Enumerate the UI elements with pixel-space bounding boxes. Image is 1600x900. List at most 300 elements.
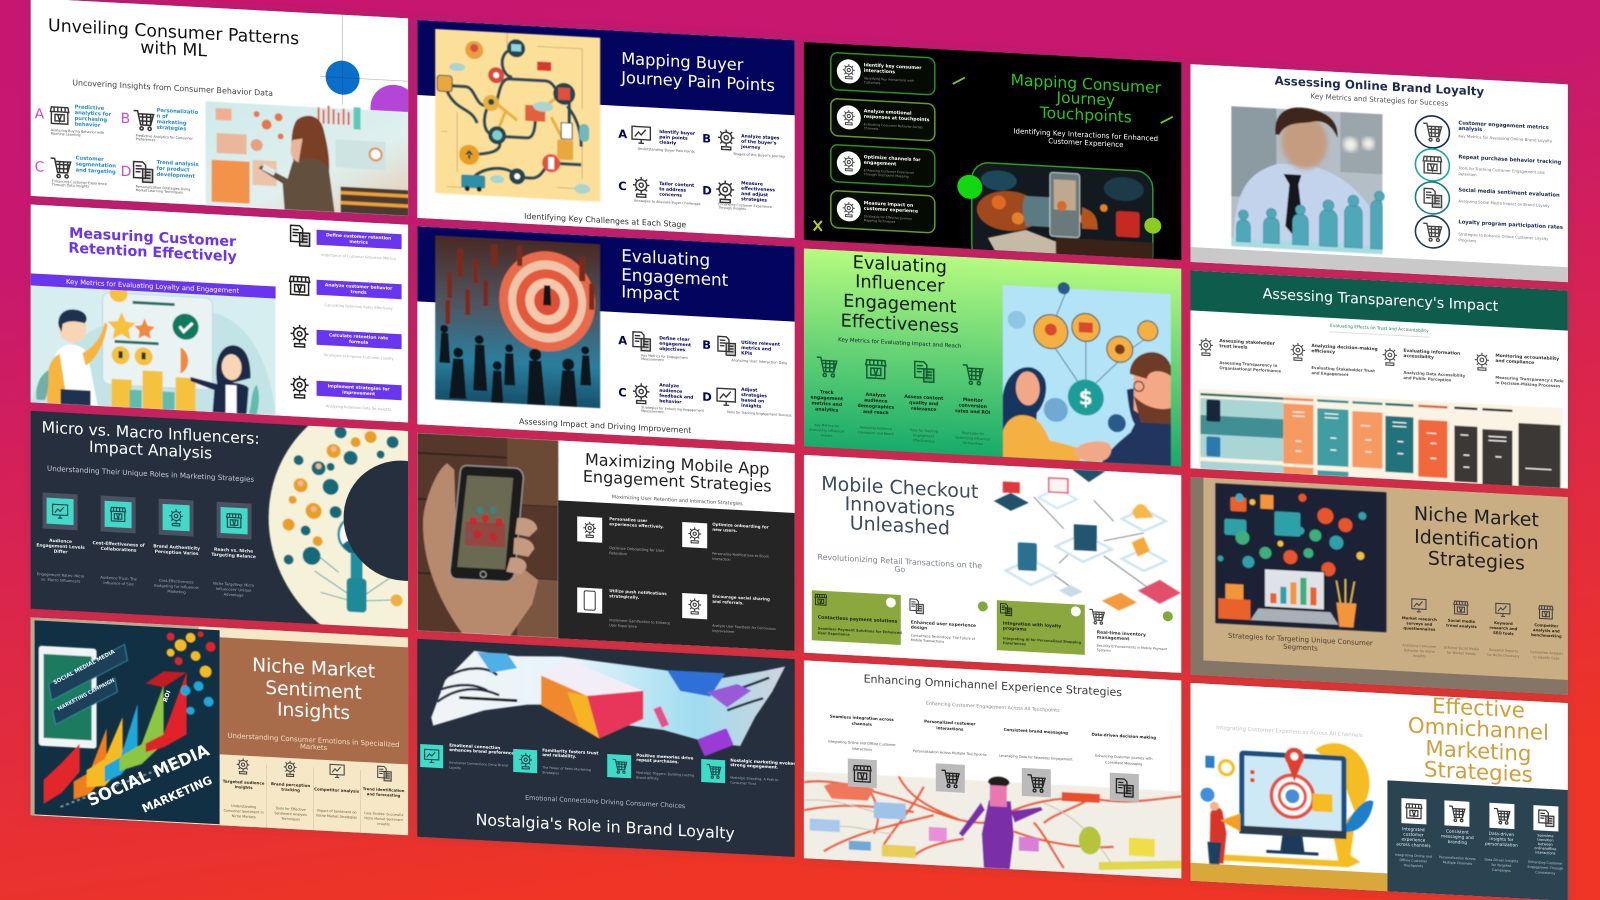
column: authenticity: Cost-Effectiveness:	[159, 579, 194, 585]
photo: phone in coffee cup	[972, 162, 1153, 272]
title: Journey	[1056, 88, 1115, 110]
column: data-driven: Data-driven	[1489, 831, 1514, 838]
panel: Evaluating Influencer Engagement Effectiveness	[804, 248, 1182, 467]
item A: A	[35, 106, 45, 123]
item: accessibility: Evaluating information	[1403, 348, 1460, 357]
item A: Key Metrics for Engagement	[641, 353, 689, 360]
item: engagement metrics: analysis	[1458, 126, 1482, 133]
panel: Niche Market Identification Strategies	[1190, 477, 1568, 695]
title: Identification	[1414, 526, 1539, 554]
panel: Unveiling Consumer Patterns with ML	[31, 0, 409, 216]
step: define	[291, 225, 402, 261]
card: inventory: Systems	[1097, 648, 1111, 653]
item B	[702, 335, 787, 365]
title: Enhancing Omnichannel Experience Strategies	[864, 672, 1122, 699]
card: interactions: Customers	[864, 80, 881, 85]
item D: Adjust	[741, 387, 758, 394]
dark content panel	[558, 500, 795, 651]
column: consistent: Leveraging Data for Seamless Engagement	[999, 754, 1073, 762]
method: surveys: Behavior for Niche	[1404, 648, 1435, 654]
item A: A	[618, 127, 627, 141]
item: decision-making: efficiency	[1311, 348, 1335, 355]
column: trends: and forecasting	[367, 791, 401, 798]
card: user experience: Enhanced user experience	[911, 620, 976, 629]
panel: Assessing Online Brand Loyalty	[1190, 64, 1568, 282]
method: keywords: research and	[1489, 625, 1518, 631]
method: keywords: Research Reports	[1489, 648, 1518, 653]
item B: Analyzing User Interaction Data	[731, 358, 787, 365]
subtitle: Uncovering Insights from Consumer Behavior Data	[72, 78, 273, 98]
item: familiarity: and reliability.	[542, 752, 577, 759]
item: repeat purchase	[1415, 148, 1562, 188]
column: seamless: online/offline	[1534, 846, 1556, 851]
item C: behavior	[659, 398, 682, 405]
column: personalized	[913, 718, 987, 794]
metric: assess: Engagement	[913, 433, 935, 438]
method: surveys	[1402, 598, 1437, 659]
column: reach: Niche Targeting: Micro	[213, 582, 255, 588]
item: push notifications: Implement Gamification to Enhance	[609, 618, 670, 625]
item A	[618, 331, 692, 364]
item A: pain points	[659, 134, 688, 142]
column: data-driven: Data-driven decision making	[1091, 732, 1156, 740]
step: analyze: trends	[351, 289, 367, 296]
item: emotional connection: Emotional Connections Drive Brand	[449, 761, 508, 768]
item: emotional connection: Loyalty	[449, 766, 461, 770]
method: surveys: questionnaires	[1403, 625, 1436, 632]
item B: Utilize relevant	[741, 340, 781, 348]
item: engagement metrics: Customer engagement metrics	[1458, 120, 1549, 131]
column: integrated: across channels	[1396, 841, 1431, 849]
column: integration: Interactions	[852, 747, 872, 752]
column: authenticity	[153, 498, 200, 595]
item: emotional connection	[420, 741, 516, 773]
item D	[702, 178, 775, 213]
illustration: isometric checkout network	[994, 465, 1181, 614]
column: seamless	[1528, 805, 1563, 876]
metric: track: Key Metrics for	[815, 423, 840, 428]
subtitle: Identifying Key Interactions for Enhanced	[1013, 127, 1158, 143]
item: trust: Organizational Performance	[1219, 365, 1281, 373]
title: Niche Market	[252, 655, 375, 683]
method: social: trend analysis	[1446, 622, 1477, 629]
step: analyze: Calculating Retention Rates Effectively	[325, 303, 393, 311]
item D: development	[157, 172, 195, 180]
item: push notifications	[577, 586, 670, 631]
card: interactions: interactions	[864, 68, 895, 75]
method: surveys: Analyzing Consumer	[1402, 643, 1437, 649]
item: familiarity: The Power of Retro Marketing	[541, 765, 591, 772]
method: social: Utilizing Social Media	[1444, 645, 1479, 651]
column: integration: Seamless integration across	[830, 714, 894, 722]
subtitle: Understanding Consumer Emotions in Specialized	[228, 732, 400, 749]
item: sentiment	[1415, 181, 1560, 221]
metric: assess: Effectiveness	[913, 438, 935, 443]
dark content panel	[1387, 780, 1568, 900]
item: memories: Nostalgic Triggers: Building Lasting	[636, 771, 694, 778]
step: define: metrics	[349, 239, 368, 246]
title: Journey Pain Points	[620, 68, 775, 95]
metric: monitor: Optimizing Influencer	[955, 435, 991, 441]
column: consistent: Consistent	[1446, 828, 1469, 836]
column: audience: Targeted audience	[223, 778, 265, 786]
item C: C	[35, 159, 45, 176]
subtitle: Segments	[1283, 643, 1318, 653]
item: emotional connection: enhances brand preference.	[449, 747, 516, 756]
illustration: social media marketing bars: SOCIAL MEDIA	[84, 740, 212, 810]
column: authenticity: Budgeting for Influencer	[154, 584, 200, 590]
column: reach: Targeting Balance	[211, 552, 256, 560]
item D: Tools for Tracking Engagement Success	[726, 410, 792, 417]
method: keywords: Keyword	[1494, 620, 1513, 626]
column: authenticity: Marketing	[167, 590, 186, 595]
illustration: journey map	[435, 29, 600, 202]
item C	[618, 176, 701, 206]
card: interactions	[831, 52, 935, 95]
card: emotional responses: Evaluating Consumer Behavior Across	[864, 122, 923, 129]
column: data-driven: Data-Driven Insights	[1484, 858, 1519, 863]
panel: Enhancing Omnichannel Experience Strategies	[804, 660, 1182, 878]
item: engagement metrics	[1415, 115, 1553, 154]
title: Micro vs. Macro Influencers:	[42, 418, 260, 448]
title: Effective	[1432, 694, 1525, 724]
item D: D	[702, 390, 712, 404]
title: Touchpoints	[1039, 104, 1132, 127]
card: user experience: Mobile Transactions	[911, 638, 944, 644]
item C: C	[618, 179, 627, 193]
column: reach: Influencers' Unique	[216, 587, 252, 593]
item: memories: repeat purchases.	[636, 757, 679, 764]
column: integrated	[1395, 798, 1432, 869]
title: Mobile Checkout	[821, 473, 978, 503]
title: Niche Market	[1414, 503, 1539, 531]
item B: Preferences	[136, 137, 156, 142]
method: competitors: to Identify Gaps	[1533, 655, 1560, 661]
item D: Enhancing Customer Experience	[718, 202, 772, 209]
step: analyze: Analyze customer behavior	[325, 282, 393, 292]
column: engagement levels: vs. Macro Influencers	[41, 578, 80, 584]
step: define: Define customer retention	[326, 232, 391, 242]
title: with ML	[140, 38, 207, 61]
item: sharing: Analyze User Feedback for Continuous	[712, 624, 776, 631]
item: sharing	[682, 592, 776, 636]
item A: Machine Learning	[51, 132, 81, 137]
item A: Analyzing Buying Behavior with	[51, 128, 104, 135]
column: perception: Brand perception	[271, 781, 310, 788]
card: emotional responses: Analyze emotional	[864, 108, 912, 117]
item: accessibility: accessibility	[1403, 353, 1434, 361]
icon: blue circle	[326, 60, 360, 96]
column: personalized: Personalized customer	[924, 719, 976, 726]
metric: track: Evaluating Influencer	[809, 428, 845, 434]
item: accountability: Monitoring accountability	[1495, 353, 1559, 362]
item: onboarding: Optimize onboarding for	[712, 522, 769, 530]
item C: C	[618, 385, 627, 400]
item A: Identify buyer	[659, 129, 696, 137]
metric: analyze: demographics	[858, 403, 894, 411]
item A: clearly	[659, 140, 676, 146]
step: implement: Analyzing Retention Data for Insights	[326, 404, 391, 412]
method: surveys: surveys and	[1406, 620, 1433, 627]
item B: Stages of the Buyer's Journey	[733, 152, 785, 159]
column: consistent: Personalization Across	[1439, 855, 1476, 861]
column: competitors: Niche Market Strategies	[316, 813, 357, 820]
column: seamless: Consistency	[1535, 870, 1555, 875]
column: perception: Sentiment Analysis	[274, 811, 307, 817]
column: trends	[363, 765, 405, 827]
accent dashes	[953, 77, 1173, 124]
illustration: social media marketing bars: ROI	[162, 690, 173, 703]
method: competitors: Competitor Analysis	[1530, 650, 1563, 656]
illustration: handshake with influencers	[1003, 279, 1171, 466]
column: seamless: interactions	[1535, 850, 1556, 856]
item: repeat purchase: Tools for Tracking Customer Engagement and	[1457, 165, 1545, 175]
item: sentiment: Social media sentiment evaluation	[1458, 187, 1560, 199]
item: accountability: Measuring Transparency's Role	[1495, 375, 1564, 383]
title: Nostalgia's Role in Brand Loyalty	[476, 810, 735, 843]
title: Influencer	[855, 271, 945, 297]
illustration: social media marketing bars: MARKETING CAMPAIGN	[57, 678, 116, 712]
photo: woman viewing data wall	[206, 99, 409, 216]
column: cost-effectiveness: Cost-Effectiveness of	[93, 540, 145, 549]
title: Effectiveness	[841, 310, 959, 338]
title: Impact Analysis	[89, 438, 212, 463]
step: implement	[291, 375, 402, 412]
item D: based on	[741, 397, 764, 405]
column: integrated: Integrating Online and	[1395, 853, 1432, 859]
title: Sentiment	[265, 678, 362, 704]
column: trends: Insights	[377, 822, 390, 826]
photo: hand holding phone	[417, 433, 558, 638]
column: consistent	[1439, 800, 1476, 866]
item B: B	[702, 131, 711, 146]
item: marketing: Nostalgic marketing evokes	[730, 758, 796, 766]
item A: objectives	[659, 346, 685, 353]
item A: Define clear	[659, 335, 690, 343]
metric: track	[809, 357, 845, 439]
metric: assess: Assess content	[904, 394, 944, 402]
card: loyalty: Integrating AI for Personalized Shopping	[1003, 636, 1082, 645]
card: contactless: Contactless payment solutions	[818, 615, 898, 625]
item B: KPIs	[741, 350, 753, 357]
column: personalized: Personalization Across Multiple Touchpoints	[913, 749, 987, 757]
item B: strategies	[157, 125, 186, 132]
item: sentiment: Analyzing Social Media Impact on Brand Loyalty	[1458, 198, 1550, 208]
item: push notifications: strategically.	[609, 593, 640, 600]
item A: purchasing	[75, 116, 107, 124]
item: sharing: Encourage social sharing	[712, 594, 770, 602]
card: user experience: design	[911, 625, 927, 631]
title: Evaluating	[853, 252, 947, 278]
column: trends: Niche Market Sentiment	[364, 816, 404, 822]
column: cost-effectiveness	[93, 495, 145, 587]
metric: assess: Tools for Tracking	[909, 428, 938, 434]
card: impact	[831, 190, 935, 233]
column: authenticity: Brand Authenticity	[153, 543, 200, 552]
item: onboarding	[682, 520, 769, 564]
subtitle: Strategies for Targeting Unique Consumer	[1228, 632, 1373, 648]
title band	[417, 20, 795, 115]
column: consistent	[999, 727, 1073, 799]
item: repeat purchase: Retention	[1458, 171, 1477, 177]
item C: Through Data Insights	[51, 183, 89, 189]
metric: assess: quality and	[909, 400, 938, 407]
item C: and targeting	[76, 167, 116, 176]
metric: track: engagement	[811, 395, 844, 402]
item A: Understanding Buyer Pain Points	[638, 147, 695, 154]
item: marketing	[701, 756, 796, 788]
metric: track: analytics	[815, 406, 839, 414]
column: data-driven	[1484, 803, 1519, 873]
item: memories	[607, 751, 694, 783]
title: Engagement	[843, 291, 957, 318]
card: channels: engagement	[864, 160, 897, 167]
item B: marketing	[157, 119, 187, 127]
subtitle: Key Metrics for Evaluating Impact and Reach	[838, 337, 962, 350]
method: keywords: for Niche Discovery	[1487, 653, 1520, 658]
card: interactions: Identifying Key Interactions with	[864, 76, 914, 83]
title: Assessing Online Brand Loyalty	[1275, 74, 1484, 99]
item C: feedback and	[659, 393, 693, 401]
column: integration	[828, 713, 896, 789]
column: seamless: transition	[1537, 838, 1553, 843]
illustration: marketing monitor	[1200, 736, 1373, 873]
item C: audience	[659, 388, 682, 395]
item D	[121, 158, 199, 195]
method: competitors	[1530, 605, 1563, 661]
column: perception: Techniques	[280, 817, 300, 822]
item: memories: Brand Affinity	[636, 776, 659, 781]
item: accessibility	[1383, 347, 1466, 383]
item: onboarding: new users.	[712, 527, 738, 533]
metric: analyze: Analyze	[866, 392, 886, 399]
title: Insights	[277, 699, 350, 724]
illustration: mind map with figure	[804, 766, 1182, 878]
icon: green circle	[957, 174, 982, 200]
item D: Trend analysis	[157, 160, 199, 168]
title band	[417, 226, 795, 322]
item C	[35, 153, 116, 190]
method: competitors: benchmarking	[1531, 632, 1562, 639]
column: data-driven: for Targeted	[1491, 863, 1511, 868]
title: Measuring Customer	[69, 225, 237, 250]
column: data-driven	[1091, 732, 1156, 803]
item: sharing: and referrals.	[712, 599, 744, 605]
item: decision-making: and Engagement	[1311, 370, 1349, 377]
item: accountability: in Decision-Making Processes	[1495, 380, 1561, 388]
metric: analyze: and reach	[863, 409, 889, 416]
metric: analyze: Analyzing Audience	[860, 425, 892, 431]
metric: monitor: rates and ROI	[955, 408, 991, 416]
method: social: for Market Trends	[1447, 651, 1476, 656]
panel: Mapping Consumer Journey Touchpoints	[804, 42, 1182, 273]
item: loyalty programs	[1415, 215, 1563, 255]
item D: Personalization Strategies Using	[136, 185, 190, 192]
panel: Maximizing Mobile App Engagement Strategies	[417, 433, 795, 651]
item B: of the buyer's	[741, 139, 777, 147]
card: user experience: Contactless Technology: The Future of	[911, 634, 976, 641]
item: decision-making: Evaluating Stakeholder Trust	[1311, 365, 1375, 373]
column: integrated: customer	[1403, 831, 1424, 838]
item C: Enhancing Customer Experience	[52, 179, 107, 186]
column: audience: Niche Markets	[232, 814, 256, 819]
subtitle: Understanding Their Unique Roles in Marketing Strategies	[47, 464, 254, 484]
title: Innovations	[845, 493, 955, 521]
item C: to address	[659, 186, 686, 194]
metric: monitor	[955, 364, 991, 446]
title: Retention Effectively	[68, 240, 238, 265]
item: loyalty programs: Loyalty program participation rates	[1458, 219, 1563, 231]
item D: for product	[157, 166, 190, 174]
metric: track: metrics and	[811, 400, 842, 408]
item D: strategies	[741, 196, 767, 204]
title: Impact	[621, 281, 680, 304]
column: integrated: Integrated	[1402, 826, 1425, 833]
panel: Mobile Checkout Innovations Unleashed	[804, 455, 1182, 673]
panel: Niche Market Sentiment Insights	[31, 617, 409, 835]
column: data-driven: Consistent Messaging	[1105, 760, 1142, 766]
panel: Mapping Buyer Journey Pain Points	[417, 20, 795, 238]
column: seamless: Enhancing Customer	[1528, 860, 1563, 866]
column: consistent: messaging and	[1441, 833, 1474, 841]
illustration: influencer network ring	[269, 387, 531, 663]
card: loyalty: programs	[1003, 625, 1027, 633]
card: impact: Measure impact on	[864, 200, 913, 209]
metric: assess: relevance	[911, 406, 936, 413]
title: Mapping Consumer	[1011, 71, 1162, 97]
card: inventory	[1089, 607, 1173, 656]
title: Unveiling Consumer Patterns	[48, 16, 299, 49]
card: emotional responses: Channels	[864, 126, 878, 131]
column: audience: Consumer Sentiment in	[224, 809, 264, 815]
comparison table	[1198, 389, 1562, 489]
item A	[35, 102, 111, 139]
column: data-driven: Enhancing Customer Journey with	[1095, 754, 1153, 761]
item D: D	[702, 183, 712, 198]
step: implement: Implement strategies for	[328, 383, 390, 393]
icon: lime circle	[1144, 217, 1161, 234]
column: competitors	[314, 763, 360, 820]
item: accessibility: Analyzing Data Accessibility	[1403, 370, 1466, 378]
illustration: team and rating board	[31, 279, 276, 416]
card: user experience	[910, 597, 988, 646]
card: emotional responses: responses at touchpoints	[864, 114, 930, 123]
item: engagement metrics: Key Metrics for Assessing Online Brand Loyalty	[1458, 133, 1553, 143]
metric: analyze: audience	[864, 397, 888, 405]
item: loyalty programs: Strategies to Enhance Online Customer Loyalty	[1458, 231, 1549, 241]
metric: track: Impact	[821, 433, 833, 438]
column: engagement levels: Differ	[54, 549, 68, 555]
illustration: social media marketing bars: SOCIAL MEDIAL MEDIA	[53, 649, 117, 686]
band: key metrics	[31, 273, 276, 299]
title: Omnichannel	[1408, 713, 1549, 746]
item: memories: Positive memories drive	[636, 753, 693, 761]
title: Maximizing Mobile App	[585, 450, 769, 479]
card: contactless	[812, 590, 902, 645]
illustration: social media marketing bars: MARKETING	[140, 773, 214, 816]
item C: Customer	[76, 155, 104, 163]
item D: and adjust	[741, 191, 769, 198]
title band	[1190, 270, 1568, 331]
item C: Strategies for Enhancing Engagement	[641, 405, 705, 413]
column: cost-effectiveness: Influence of Size	[103, 581, 135, 587]
card: inventory: Real-time inventory	[1097, 629, 1146, 638]
item: familiarity	[513, 746, 598, 777]
column: engagement levels: Audience	[49, 538, 72, 545]
item: decision-making: Analyzing decision-making	[1311, 343, 1378, 352]
item: decision-making	[1291, 342, 1378, 379]
item A: analytics for	[75, 110, 111, 118]
